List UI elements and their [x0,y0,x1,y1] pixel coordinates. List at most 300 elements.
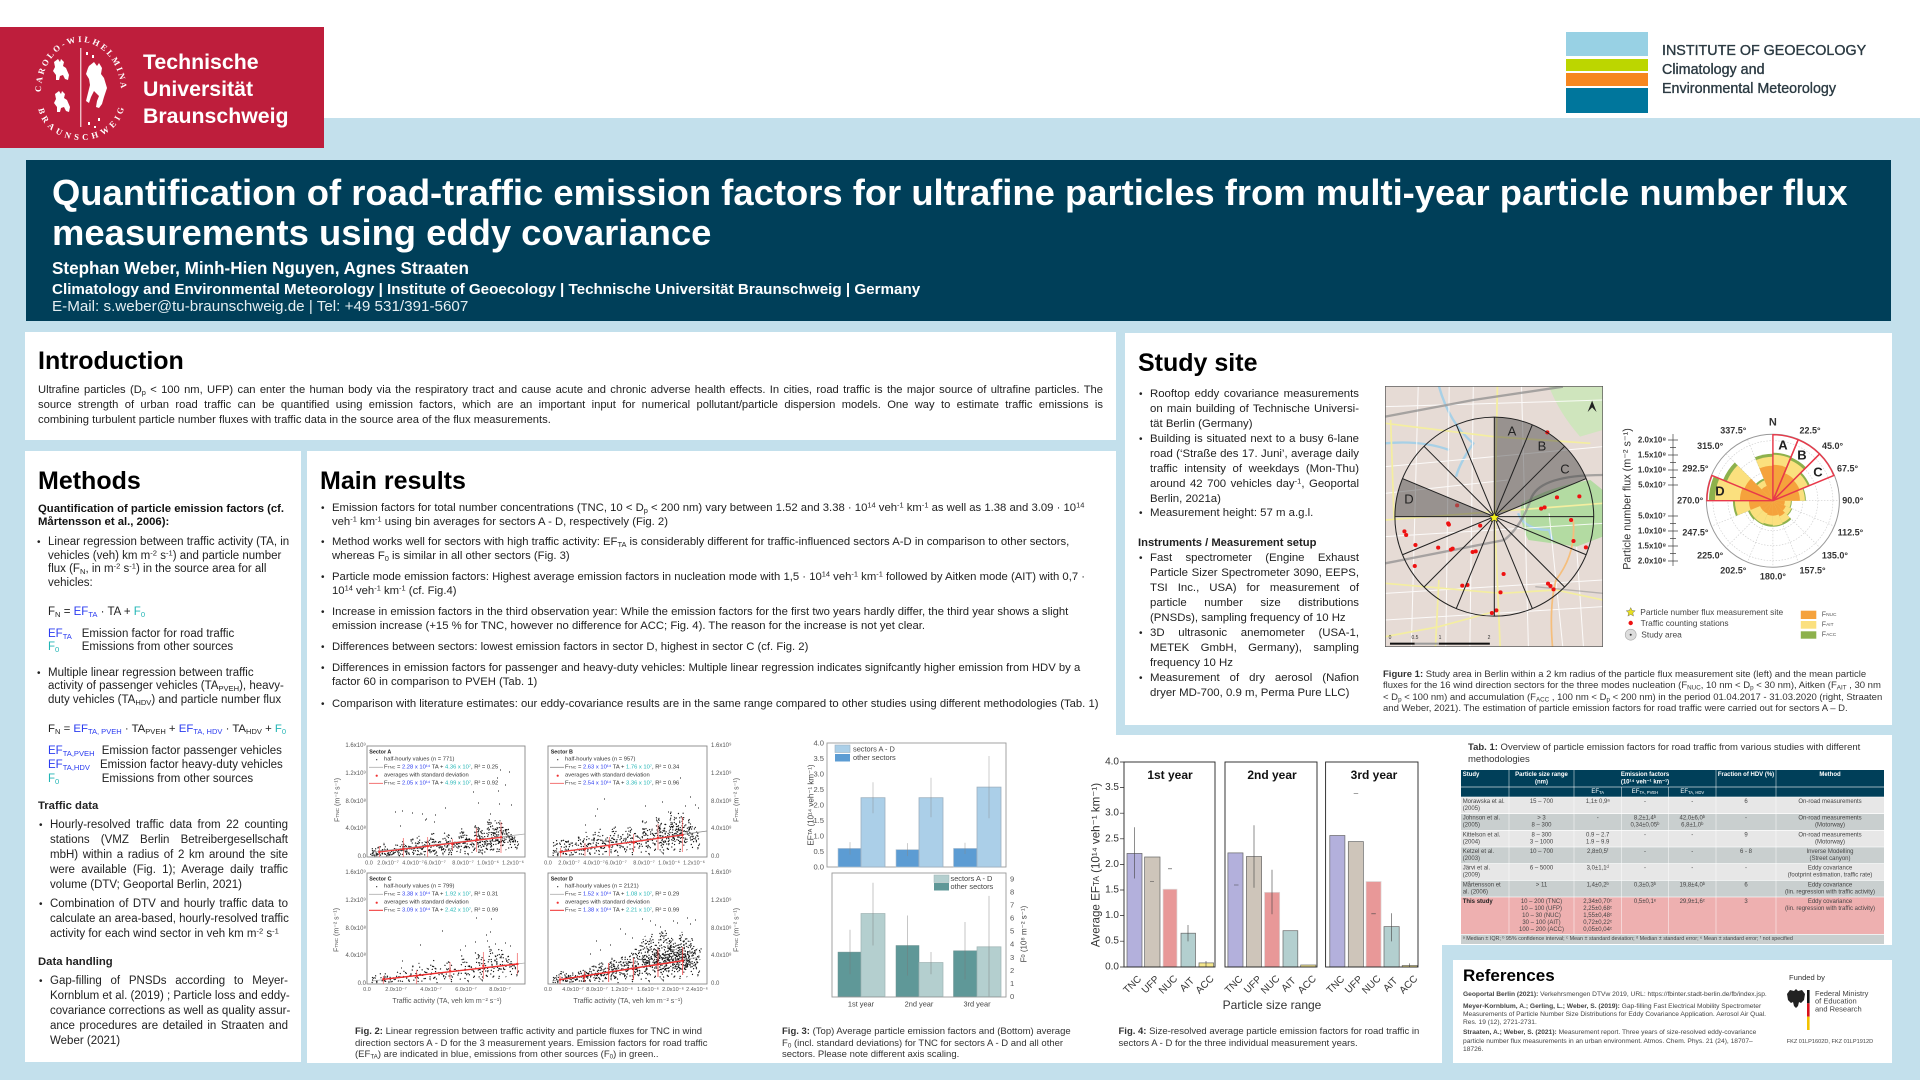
table rows: 1,1± 0,9ᵃ [1586,799,1610,805]
table rows: Mårtensson et [1463,881,1501,888]
bullet: particle modes: Particle mode emission factors: Highest average emission factors in nucleation mode with 1,5 · 1014 veh-1 km-1 followed by Aitken mode (AIT) with 0,7 · [332,570,1085,583]
rose direction labels: 67.5° [1837,463,1859,473]
bullet: area-based traffic activity [50,897,288,942]
axis labels: figure 4: NUC [1157,973,1180,997]
bullet: linear regression [48,536,289,590]
bullet: third year increase [332,606,1068,633]
legend: multiple formula terms: Emission factor heavy-duty vehicles [100,758,283,770]
rose direction labels: 22.5° [1800,426,1821,436]
axes labels: figure 2: 0.0 [358,981,367,987]
axes labels: figure 2: 4.0x10⁸ [711,952,732,959]
legend: multiple formula terms [48,744,283,785]
axes labels: figure 2: 1.2x10⁹ [345,770,366,777]
axes labels: figure 2: 4.0x10⁻⁷ [420,986,442,993]
legend: multiple formula terms: Emissions from other sources [102,772,253,784]
map sector letters: B [1538,438,1546,454]
bullet: particle modes [332,571,1085,598]
bullet: hourly traffic data: were available (Fig. 1); Average daily traffic [50,864,288,876]
axes labels: figure 2: 2.0x10⁻⁷ [558,859,580,866]
bar chart: average F0: 3rd year [963,1000,991,1008]
panel: study site [1125,333,1892,725]
rose sector letters: C [1813,464,1823,480]
reference: Straaten and Weber: Straaten, A.; Weber, S. (2021): Measurement report. Three years of size-resolved eddy-covariance [1463,1029,1756,1036]
panel: methods [25,451,301,1062]
bar chart: average emission factors: 3.5 [813,754,824,763]
axis labels: figure 4: ACC [1398,974,1420,996]
axes labels: figure 2: 0.0 [711,854,720,860]
axes labels: figure 2: FTNC (m⁻² s⁻¹) [334,908,340,952]
rose: highlighted sectors A to D [1707,435,1837,519]
bullet: linear regression: flux (FN, in m-2 s-1) in the source area for all [48,562,266,576]
contact: E-Mail: s.weber@tu-braunschweig.de | Tel: +49 531/391-5607 [52,298,468,314]
table rows: 0.9 – 2.7 [1586,832,1610,838]
table rows: al. (2006) [1463,889,1488,895]
map scale bar [1390,643,1490,645]
icon: measurement site star [1489,513,1499,522]
bullet: method performance: Method works well for sectors with high traffic activity: EFTA is considerably different for traffic-influenced sectors A-D in comparison to other sectors, [332,536,1069,549]
axes labels: figure 2: Traffic activity (TA, veh km m⁻² s⁻¹) [573,998,683,1005]
table rows: Inverse Modelling [1806,849,1854,855]
caption: figure 2 [355,1026,708,1061]
axes labels: figure 2: 6.0x10⁻⁷ [455,986,477,993]
bullet: gap filling: ance procedures are detailed in Straaten and [50,1020,288,1032]
rose flux scale [1622,428,1678,570]
bullet: linear regression: vehicles: [48,577,93,589]
axes labels: figure 2: 8.0x10⁻⁷ [452,859,474,866]
table rows: (footprint estimation, traffic rate) [1788,873,1872,879]
reference: Meyer-Kornblum: Meyer-Kornblum, A.; Gerling, L.; Weber, S. (2019): Gap-filling Fast Electrical Mobility Spectrometer [1463,1003,1761,1010]
table rows: (Street canyon) [1809,856,1851,862]
table rows: Johnson et al. [1463,816,1500,822]
map: study area in Berlin [1385,386,1603,647]
table rows: 10 – 30 (NUC) [1522,913,1561,919]
axes labels: figure 2: 2.0x10⁻⁶ [662,986,684,993]
table rows: On-road measurements [1798,799,1862,805]
reference: Meyer-Kornblum: Measurements of Particle Number Size Distributions for Eddy Covariance Application. Aerosol Air Qual. [1463,1011,1766,1018]
bar panel: 1st year: 1st year [1147,768,1193,782]
axes labels: figure 2: 4.0x10⁻⁷ [562,986,584,993]
bar chart: average F0: 4 [1010,940,1014,949]
rose flux scale: 1.5x10⁸ [1638,542,1666,550]
rose legend [1801,611,1837,639]
bullet: gap filling: covariance corrections as well as quality assur- [50,1004,290,1016]
bullet: vehicle differences: Differences in emission factors for passenger and heavy-duty vehicles: Multiple linear regression indicates signifcantly higher emission from HDV by a [332,662,1080,674]
table rows: 3 [1744,899,1748,905]
map sector letters: A [1508,424,1517,438]
rose flux scale: 5.0x10⁷ [1638,480,1666,490]
bullet: fast spectrometer: TSI Inc., USA) for measurement of [1150,582,1359,594]
bullet: area-based traffic activity: Combination of DTV and hourly traffic data to [50,898,288,910]
bullet: gap filling: Kornblum et al. (2019) ; Particle loss and eddy- [50,990,290,1002]
map legend: Study area [1641,630,1682,640]
table rows: (2003) [1463,856,1480,862]
axis labels: figure 4: 0.0 [1105,962,1119,972]
table rows: 10 – 700 [1530,849,1554,855]
axes labels: figure 2: 2.0x10⁻⁷ [377,859,399,866]
panel: result figures [307,735,1442,1063]
caption: figure 3: Fig. 3: (Top) Average particle emission factors and (Bottom) average [782,1026,1071,1037]
rose: accumulation mode [1709,450,1812,529]
legend: formula terms: EFTA [48,628,72,640]
map legend [1625,607,1784,640]
axis labels: figure 4: UFP [1242,974,1264,996]
table rows: 9 [1744,832,1748,838]
table rows: (2009) [1463,873,1480,879]
axes labels: figure 2: 2.0x10⁻⁷ [385,986,407,993]
table header: (nm) [1535,779,1548,785]
table rows: (Motorway) [1815,839,1845,845]
title: Quantification of road-traffic emission factors for ultrafine particles from multi-year particle number flux [52,172,1848,213]
axis labels: figure 4: TNC [1223,974,1245,996]
axes labels: figure 2: 1.0x10⁻⁶ [658,859,680,866]
bar chart: average emission factors [806,738,1006,872]
subheading: data handling: Data handling [38,956,113,968]
map sector letters: C [1560,462,1570,476]
chart: figure 3 bars [806,738,1028,1008]
icon: university seal: BRAUNSCHWEIG [38,108,124,140]
formula: multiple regression: FN = EFTA, PVEH · TAPVEH + EFTA, HDV · TAHDV + F0 [48,722,286,735]
caption: figure 1: Figure 1: Study area in Berlin within a 2 km radius of the particle flux measurement site (left) and the mean particle [1383,669,1866,680]
bar chart: average F0: 7 [1010,900,1014,910]
scatter panel: sector D: FTNC = 1.38 x 10¹⁴ TA + 2.21 x 10⁷, R² = 0.99 [565,906,679,913]
rose direction labels: 337.5° [1720,426,1747,436]
rose direction labels: 270.0° [1677,496,1704,506]
axes labels: figure 2: 2.4x10⁻⁶ [686,986,708,993]
logo: funding ministry: and Research [1815,1004,1862,1014]
rose direction labels: 202.5° [1720,566,1747,576]
table rows: 30 – 100 (AIT) [1522,920,1561,926]
bullet: building location: Berlin, 2021a) [1150,492,1221,504]
scatter panel: sector B: FTNC = 2.54 x 10¹⁴ TA + 3.36 x 10⁷, R² = 0.96 [565,779,679,786]
rose flux scale: 5.0x10⁷ [1638,512,1666,520]
table rows: 0,05±0,04ᶜ [1583,927,1612,933]
axes labels: figure 2: 1.2x10⁹ [711,897,732,904]
bullet: vehicle differences [332,662,1080,689]
table rows: 6 - 8 [1740,849,1753,855]
map sectors A to D shading [1395,417,1586,517]
table rows: - [1691,866,1693,872]
bar chart: average F0: 9 [1010,874,1014,883]
caption: figure 1: fluxes for the 16 wind direction sectors for the three modes nucleation (FNUC, 10 nm < Dp < 30 nm), Aitken (FAIT , 30 nm [1383,680,1881,692]
table rows: On-road measurements [1798,832,1862,838]
axis labels: figure 4: ACC [1194,974,1217,996]
scatter panel: sector B: averages with standard deviation [565,773,650,779]
table rows: 10 – 100 (UFP) [1521,906,1562,912]
table header: EFTA, PVEH [1632,789,1658,795]
axes labels: figure 2: 0.0 [544,987,552,993]
bar panel: 3rd year [1326,762,1418,967]
table rows: Kittelson et al. [1463,832,1501,838]
bullet: dry aerosol [1150,670,1359,700]
subheading: instruments: Instruments / Measurement setup [1138,537,1316,549]
table rows: 8 – 300 [1531,832,1552,838]
logo wordmark: Technische [143,50,259,74]
title [52,172,1848,253]
axes labels: figure 2 [334,742,740,1005]
rose flux scale: 1.0x10⁸ [1638,466,1666,474]
logo: funding ministry: Federal Ministry [1815,989,1869,998]
legend: formula terms: Emissions from other sources [82,641,233,653]
bullet: linear regression: Linear regression between traffic activity (TA, in [48,536,289,548]
caption: figure 4 [1118,1026,1419,1049]
heading: introduction: Introduction [38,347,184,375]
axes labels: figure 2: 1.2x10⁻⁶ [502,859,524,866]
legend: formula terms: Emission factor for road traffic [82,628,234,640]
map legend: Traffic counting stations [1641,618,1729,628]
scatter panel: sector C: FTNC = 3.38 x 10¹⁴ TA + 1.92 x 10⁷, R² = 0.31 [384,890,498,897]
table rows: - [1644,849,1646,855]
bar chart: average F0: 8 [1010,888,1014,896]
axis labels: figure 4: TNC [1325,974,1347,996]
table rows: - [1597,816,1599,822]
table rows: Eddy covariance [1808,866,1853,872]
rose direction labels: 315.0° [1697,441,1724,451]
bar chart: average emission factors: EFTA (10¹⁴ veh⁻¹ km⁻¹) [806,764,816,846]
map sector letters [1404,424,1570,506]
table rows [1463,799,1875,942]
bullet: vehicle differences: factor 60 in comparison to PVEH (Tab. 1) [332,676,537,688]
heading: methods: Methods [38,467,141,495]
map sector letters: D [1404,492,1414,506]
institute name: Climatology and [1662,62,1765,78]
axes labels: figure 2: 8.0x10⁻⁷ [633,859,655,866]
logo: funding ministry: FKZ 01LP1602D, FKZ 01LP1912D [1787,1039,1873,1045]
rose direction labels: 225.0° [1697,551,1724,561]
table rows: - [1691,849,1693,855]
rose: nucleation mode [1740,463,1802,517]
axes labels: figure 2: 1.6x10⁹ [711,869,732,876]
scatter panel: sector C: half-hourly values (n = 799) [384,884,454,890]
axes labels: figure 2: 6.0x10⁻⁷ [424,859,446,866]
table rows: 3 – 1000 [1530,839,1554,845]
scatter panel: sector D: Sector D [551,877,573,883]
bullet: dry aerosol: Measurement of dry aerosol (Nafion [1150,672,1359,684]
caption: figure 2: direction sectors A - D for the 3 measurement years. Emission factors for road traffic [355,1038,708,1049]
table rows: 2,8±0,5ᶠ [1587,848,1609,855]
axis labels: figure 4: AIT [1178,976,1197,994]
axis labels: figure 4: NUC [1259,973,1282,997]
table rows: ᵃ Median ± IQR; ᵇ 95% confidence interval; ᶜ Mean ± standard deviation; ᵈ Median ± standard error; ᵉ Mean ± standard error; ᶠ not specified [1463,936,1793,942]
axes labels: figure 2: 0.0 [363,987,371,993]
caption: figure 2: Fig. 2: Linear regression between traffic activity and particle fluxes for TNC in wind [355,1026,702,1037]
table rows: This study [1463,899,1493,905]
rose direction labels: 292.5° [1682,463,1709,473]
table rows: 0,72±0,22ᶜ [1583,920,1612,926]
bullet: hourly traffic data: stations (VMZ Berlin Betreibergesellschaft [50,834,288,846]
bullet: building location: road (‘Straße des 17. Juni’, average daily [1150,448,1359,460]
text: introduction: source strength of urban road traffic can be quantified using emission factors, which are an important input for numerical pollutant/particle dispersion models. One way to estimate traffic emissions is [38,399,1103,411]
table rows: (Motorway) [1815,823,1845,829]
caption: figure 4: sectors A - D for the three individual measurement years. [1118,1038,1358,1049]
axes labels: figure 2: 0.0 [544,860,552,866]
scatter panel: sector C [367,873,525,984]
bullet: gap filling: Weber (2021) [50,1034,120,1046]
axes labels: figure 2: 1.6x10⁹ [345,742,366,749]
axes labels: figure 2: 4.0x10⁻⁷ [583,859,605,866]
axis labels: figure 4: 2.0 [1105,859,1119,870]
scatter panel: sector C: FTNC = 3.09 x 10¹⁴ TA + 2.42 x 10⁷, R² = 0.99 [384,906,498,913]
bar chart: average emission factors: 2.5 [813,785,824,794]
subheading: quantification: Mårtensson et al., 2006): [38,516,169,528]
axis labels: figure 4: AIT [1381,976,1400,994]
bullet: multiple regression [48,667,284,708]
bullet: measurement height: Measurement height: 57 m a.g.l. [1150,507,1313,519]
bullet: multiple regression: Multiple linear regression between traffic [48,667,254,679]
bar chart: average F0: 1st year [848,1000,875,1008]
panel: introduction [25,332,1116,440]
bar chart: average F0: 2nd year [905,1000,934,1008]
bullet: fast spectrometer: (PNSDs), sampling frequency of 10 Hz [1150,612,1346,624]
table rows: - [1691,832,1693,838]
bar chart: average emission factors: 1.5 [813,816,824,825]
bar panel: 1st year [1124,762,1215,967]
bullet: linear regression: vehicles (veh) km m-2 s-1) and particle number [48,548,281,562]
subheading: traffic data: Traffic data [38,800,98,812]
table: emission factors [1461,770,1884,944]
reference: Meyer-Kornblum: Res. 19 (12), 2721-2731. [1463,1019,1537,1026]
scatter panel: sector B: FTNC = 2.63 x 10¹⁴ TA + 1.76 x 10⁷, R² = 0.34 [565,763,680,770]
table header: EFTA [1591,789,1604,795]
chart: figure 2 scatter plots [333,742,740,1005]
table rows: - [1644,799,1646,805]
map: study area in Berlin: 0 [1389,635,1392,641]
axes labels: figure 2: FTNC (m⁻² s⁻¹) [334,778,342,822]
table header: Study [1463,772,1480,778]
axes labels: figure 2: 8.0x10⁻⁷ [586,986,608,993]
axes labels: figure 2: 6.0x10⁻⁷ [605,859,627,866]
bar chart: average emission factors: 1.0 [813,832,824,840]
axis labels: figure 4 [1090,756,1420,1012]
reference: Straaten and Weber [1463,1029,1756,1053]
heading: references: References [1463,966,1555,985]
table header: EFTA, HDV [1680,789,1704,795]
legend: multiple formula terms: EFTA,HDV [48,758,90,771]
bullet: rooftop measurements [1150,386,1359,432]
table rows: 100 – 200 (ACC) [1519,927,1564,933]
rose direction labels: 180.0° [1760,572,1786,582]
rose direction labels: 90.0° [1842,496,1864,506]
rose legend: FAIT [1822,622,1834,628]
bar chart: average F0: 6 [1010,914,1014,923]
table rows: Morawska et al. [1463,799,1505,805]
bullet: method performance [332,536,1069,563]
table header: Particle size range [1515,772,1569,778]
bullet: hourly traffic data: mbH) within a radius of 2 km around the site [50,849,288,861]
bullet: multiple regression: duty vehicles (TAHDV) and particle number flux [48,694,281,707]
table rows: On-road measurements [1798,816,1862,822]
table rows: Eddy covariance [1808,882,1853,888]
rose sector letters: D [1715,484,1725,498]
legend: formula terms [48,628,234,654]
caption: table 1 [1468,742,1860,765]
icon: north arrow [1588,401,1597,412]
bullet: gap filling [50,974,288,1048]
bullet: area-based traffic activity: activity for each wind sector in veh km m-2 s-1 [50,926,279,940]
bar chart: average F0: other sectors [950,882,994,891]
chart: figure 4 size-resolved bars [1090,756,1420,1012]
table rows: 0,5±0,1ᵉ [1634,899,1657,905]
bullet: emission factors for TNC: veh-1 km-1 using bin averages for sectors A - D, respectively (Fig. 2) [332,514,668,528]
bar chart: average F0 [832,873,1028,1008]
table rows: 1,55±0,48ᶜ [1583,913,1612,919]
rose sector letters: B [1797,448,1807,462]
axes labels: figure 2: 4.0x10⁻⁷ [402,859,424,866]
title band [26,160,1891,321]
axis labels: figure 4: TNC [1122,974,1144,996]
table rows: - [1745,866,1747,872]
bullet: method performance: whereas F0 is similar in all other sectors (Fig. 3) [332,550,570,563]
table rows: - [1745,816,1747,822]
axes labels: figure 2: 1.6x10⁻⁶ [637,986,659,993]
bullet: rooftop measurements: on main building of Technische Universi- [1150,402,1359,414]
table rows: 6 [1744,882,1748,888]
caption: table 1: Tab. 1: Overview of particle emission factors for road traffic from various studies with different [1468,742,1860,753]
legend: multiple formula terms: Emission factor passenger vehicles [102,744,282,756]
scatter panel: sector A: half-hourly values (n = 771) [384,757,454,763]
bullet: hourly traffic data: Hourly-resolved traffic data from 22 counting [50,819,288,831]
bar panel: 2nd year: 2nd year [1247,768,1297,782]
bullet: third year increase: Increase in emission factors in the third observation year: While the emission factors for the first two years hardly differ, the third year shows a slight [332,606,1068,618]
bar chart: average F0: F0 (10⁸ m⁻² s⁻¹) [1020,905,1028,962]
axis labels: figure 4: 1.0 [1105,910,1119,921]
bullet: anemometer: frequency 10 Hz [1150,657,1233,669]
axes labels: figure 2: 8.0x10⁻⁷ [489,986,511,993]
map: study area in Berlin: 0.5 [1412,635,1419,641]
scatter panel: sector A: FTNC = 2.05 x 10¹⁴ TA + 4.99 x 10⁷, R² = 0.92 [384,779,498,786]
panel: main results [307,451,1116,735]
panel: table of literature estimates [1442,735,1892,945]
bar chart: average F0: sectors A - D [950,874,992,883]
table rows: 2,25±0,68ᶜ [1583,906,1612,912]
bar chart: average emission factors: other sectors [853,753,896,762]
axes labels: figure 2: 1.2x10⁻⁶ [683,859,705,866]
rose flux scale: 2.0x10⁸ [1638,556,1666,566]
scatter panel: sector D: averages with standard deviation [565,900,650,906]
table rows: Järvi et al. [1463,866,1490,872]
axes labels: figure 2: 1.2x10⁻⁶ [611,986,633,993]
bar panel: 2nd year [1225,762,1317,967]
caption: figure 1: < Dp < 100 nm) and accumulation (FACC , 100 nm < Dp < 200 nm) in the period 01.04.2017 - 31.03.2020 (right, Straaten [1383,692,1882,703]
table rows: 3,0±1,1ᵈ [1587,865,1609,872]
bullet: fast spectrometer: Particle Sizer Spectrometer 3090, EEPS, [1150,567,1359,579]
table rows: 15 – 700 [1530,799,1554,805]
table rows: - [1644,832,1646,838]
map legend: Particle number flux measurement site [1640,607,1784,617]
bullet: dry aerosol: dryer MD-700, 0.9 m, Perma Pure LLC) [1150,686,1349,698]
bullet: gap filling: Gap-filling of PNSDs according to Meyer- [50,974,288,986]
axis labels: figure 4: 0.5 [1105,936,1119,947]
table header: Emission factors [1621,772,1670,778]
table rows: 6 – 5000 [1530,866,1554,872]
bullet: literature comparison: Comparison with literature estimates: our eddy-covariance results are in the same range compared to other studies using different methodologies (Tab. 1) [332,698,1098,710]
axes labels: figure 2: 1.6x10⁹ [345,869,366,876]
rose direction labels: 247.5° [1682,528,1709,538]
table rows: - [1691,799,1693,805]
bullet: area-based traffic activity: calculate an area-based, hourly-resolved traffic [50,913,289,925]
table header: (10¹⁴ veh⁻¹ km⁻¹) [1621,778,1669,785]
axes labels: figure 2: 8.0x10⁸ [345,925,366,932]
bar chart: average F0: 1 [1010,979,1014,988]
scatter panel: sector B: half-hourly values (n = 957) [565,757,635,763]
axes labels: figure 2: Traffic activity (TA, veh km m⁻² s⁻¹) [392,998,502,1005]
bullet: anemometer [1150,626,1359,671]
bar chart: average F0: 5 [1010,927,1014,936]
axis labels: figure 4: AIT [1280,976,1298,994]
axis labels: figure 4: Average EFTA (10¹⁴ veh⁻¹ km⁻¹) [1090,783,1102,947]
axis labels: figure 4: UFP [1140,974,1162,996]
axes labels: figure 2: 1.6x10⁹ [711,742,732,749]
caption: figure 2: (EFTA) are indicated in blue, emissions from other sources (F0) in green.. [355,1049,659,1061]
